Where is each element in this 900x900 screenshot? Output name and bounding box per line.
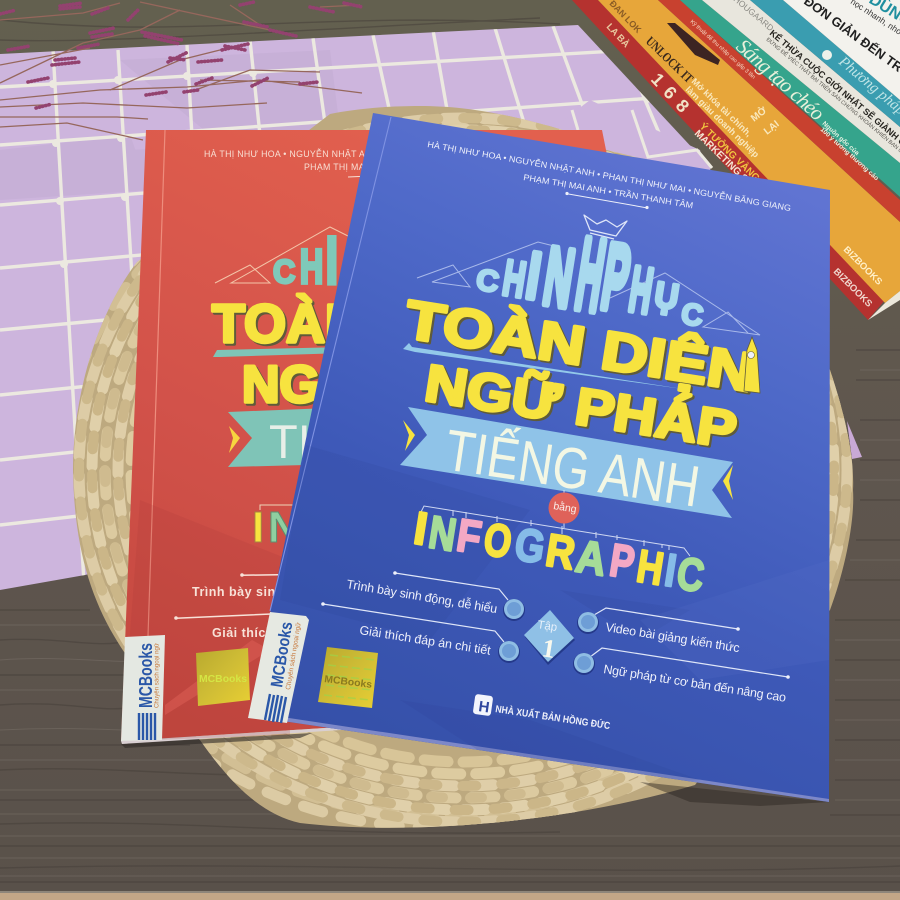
feature list — [321, 571, 790, 705]
heading: CHINH PHỤC: I — [522, 238, 546, 313]
lilac grid mat — [0, 24, 862, 600]
feature: Giải thích đáp án — [321, 602, 520, 663]
book: dark red spine: Ý TƯỞNG VÀNG — [697, 120, 763, 184]
book: orange spine: UNLOCK IT — [643, 33, 697, 86]
crown icon — [584, 215, 627, 239]
heading: CHINH PHỤC: P — [596, 224, 637, 330]
ribbon under first heading — [403, 343, 683, 389]
book: dark red spine: 168 — [647, 69, 699, 122]
book: green spine: Sáng tạo chéo — [732, 34, 829, 125]
feature: Ngữ pháp từ cơ bản — [573, 648, 790, 705]
heading: INFOGRAPHIC: A — [572, 531, 610, 586]
heading: CHINH PHỤC: C — [474, 263, 501, 299]
heading: CHINH PHỤC: H — [499, 250, 529, 308]
red book title fragment: TIẾ — [269, 415, 342, 468]
feature: Trình bày sinh động — [346, 571, 525, 621]
red book authors: PHẠM THỊ MAI ANH — [304, 162, 389, 172]
publisher logo: NHÀ XUẤT BẢN HỒNG ĐỨC — [495, 702, 611, 732]
feature: Ngữ pháp từ cơ bản: Ngữ pháp từ cơ bản đến nâng cao — [603, 662, 787, 705]
book: orange spine: MỞ — [748, 103, 770, 124]
red book title fragment: I — [252, 503, 264, 552]
book: orange spine: làm giàu doanh nghiệp — [684, 84, 761, 160]
red book feature lines: Trình bày sinh động — [192, 585, 320, 599]
dried purple flowers — [0, 2, 362, 140]
book: cream spine — [702, 0, 900, 184]
blue book hologram sticker: MCBooks — [324, 674, 373, 691]
heading: INFOGRAPHIC: C — [673, 547, 708, 602]
red book hologram sticker: MCBooks — [199, 674, 247, 685]
heading: INFOGRAPHIC: P — [606, 534, 638, 589]
book: dark red spine: MARKETING SÁNG — [692, 127, 767, 200]
red book MCBooks label: MCBooks — [136, 643, 156, 708]
feature: Video bài giảng — [577, 608, 741, 655]
icon: Big Ben tower — [744, 337, 760, 393]
red book feature lines — [174, 573, 340, 640]
red book MCBooks label: Chuyên sách ngoại ngữ — [154, 642, 160, 708]
red book title fragment: N — [268, 503, 300, 552]
heading: NGỮ PHÁP: NGỮ PHÁP — [423, 356, 742, 462]
publisher logo: H — [477, 698, 491, 716]
book: thin red spine — [658, 0, 900, 222]
heading: INFOGRAPHIC: N — [425, 506, 460, 561]
heading: CHINH PHỤC: N — [538, 229, 580, 325]
book: orange spine: Mở khóa tài chính, — [690, 76, 754, 139]
red book title fragment: NG — [242, 356, 320, 414]
heading: TOÀN DIỆN: TOÀN DIỆN — [401, 289, 758, 403]
heading: CHINH PHỤC: H — [625, 253, 657, 327]
red book MCBooks label — [121, 635, 165, 741]
red book title fragment: H — [300, 239, 323, 294]
red book title fragment: TOÀN — [212, 294, 364, 354]
red book authors: HÀ THỊ NHƯ HOA • NGUYỄN NHẬT ANH — [204, 148, 378, 159]
heading: INFOGRAPHIC: H — [633, 540, 667, 595]
book: green spine: Nguồn gốc của — [821, 119, 862, 157]
feature: Trình bày sinh động: Trình bày sinh động, dễ hiểu — [346, 576, 499, 616]
book: orange spine — [598, 0, 900, 303]
badge: bằng — [548, 490, 580, 528]
red book title fragment: I — [326, 223, 338, 297]
book: teal-blue spine — [750, 0, 900, 127]
page edge — [868, 291, 900, 320]
book: dark red spine: LA BÀ — [604, 22, 631, 50]
red book (volume behind) — [121, 130, 612, 748]
publisher logo — [473, 694, 611, 732]
shadow — [121, 733, 312, 748]
heading: CHINH PHỤC — [474, 217, 705, 333]
blue book hologram sticker — [318, 647, 378, 708]
book: orange spine: BIZBOOKS — [841, 244, 884, 288]
book: green spine — [680, 0, 900, 197]
badge: bằng: bằng — [553, 499, 578, 516]
cover — [249, 113, 830, 802]
heading: TOÀN DIỆN: TOÀN DIỆN — [403, 291, 760, 405]
heading: NGỮ PHÁP: NGỮ PHÁP — [421, 354, 740, 460]
cover geometric pattern — [295, 446, 699, 781]
heading: INFOGRAPHIC: O — [480, 513, 515, 568]
diamond badge: Tập 1: Tập — [537, 619, 558, 634]
red book hologram sticker — [196, 648, 250, 706]
heading: INFOGRAPHIC: F — [453, 509, 485, 563]
round woven straw placemat — [48, 100, 870, 840]
heading: CHINH PHỤC: Ụ — [652, 275, 681, 318]
banner: TIẾNG ANH: TIẾNG ANH — [441, 418, 704, 520]
blue book MCBooks label: Chuyên sách ngoại ngữ — [285, 622, 303, 690]
heading: INFOGRAPHIC — [410, 502, 708, 602]
authors: PHẠM THỊ MAI ANH • TRẦN THANH TÂM — [523, 172, 694, 210]
book: orange spine: LẠI — [762, 119, 782, 137]
diamond badge: Tập 1: 1 — [540, 633, 557, 664]
red book title fragment: NG — [244, 358, 322, 416]
book: green spine: 100 ý tưởng thương cáo — [819, 126, 880, 182]
book: thin red spine: Kỹ thuật để thu nhập cao gấp 3 lần — [689, 18, 757, 81]
book shadow — [640, 782, 829, 806]
diamond badge: Tập 1 — [524, 610, 575, 665]
red book title fragment — [212, 223, 380, 552]
stack of books top right — [572, 0, 900, 320]
feature: Video bài giảng: Video bài giảng kiến thức — [605, 620, 741, 655]
heading: CHINH PHỤC: C — [679, 297, 705, 333]
red book feature lines: Giải thích đáp án — [212, 626, 321, 640]
feature: Giải thích đáp án: Giải thích đáp án chi tiết — [359, 623, 492, 658]
heading: INFOGRAPHIC: R — [542, 525, 579, 580]
bit of lilac mat visible past the straw — [556, 100, 712, 170]
red book title fragment: TOÀN — [214, 296, 366, 356]
book: dark red spine — [572, 0, 885, 320]
blue book MCBooks label: MCBooks — [267, 620, 296, 689]
triangle outlines — [417, 242, 760, 335]
heading: INFOGRAPHIC: I — [661, 544, 680, 596]
book: dark red spine: BIZBOOKS — [831, 266, 874, 310]
heading: INFOGRAPHIC: I — [410, 502, 431, 555]
red book title fragment: C — [273, 253, 295, 290]
blue book MCBooks label — [248, 612, 309, 723]
heading: CHINH PHỤC: H — [570, 217, 612, 332]
heading: INFOGRAPHIC: G — [511, 518, 548, 573]
banner: TIẾNG ANH — [400, 407, 733, 520]
authors: HÀ THỊ NHƯ HOA • NGUYỄN NHẬT ANH • PHAN THỊ NHƯ MAI • NGUYỄN BĂNG GIANG — [427, 138, 792, 213]
red book authors — [204, 148, 389, 172]
blue book (volume 1, front) — [248, 113, 830, 806]
